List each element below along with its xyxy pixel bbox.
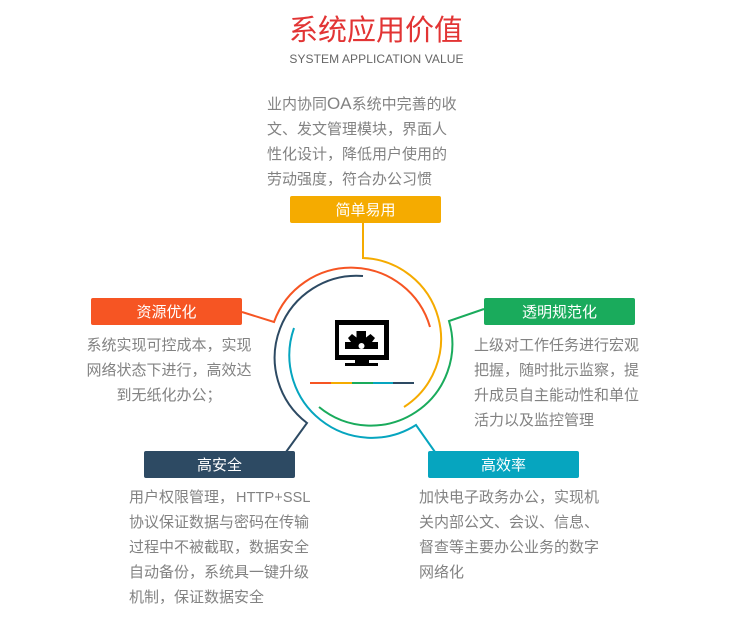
badge: security: 高安全 bbox=[197, 457, 242, 474]
text block: security: 用户权限管理，HTTP+SSL bbox=[129, 489, 311, 506]
text block: security: 自动备份，系统具一键升级 bbox=[129, 564, 309, 581]
arc: standardisation bbox=[319, 309, 484, 426]
text block: resource optimisation: 到无纸化办公； bbox=[116, 387, 222, 404]
text block: ease of use: 性化设计，降低用户使用的 bbox=[267, 146, 447, 163]
text block: standardisation: 上级对工作任务进行宏观 bbox=[474, 337, 639, 354]
arc: security bbox=[275, 276, 363, 452]
text block: efficiency: 网络化 bbox=[419, 564, 464, 581]
badge: efficiency bbox=[428, 451, 579, 478]
badge: ease of use: 简单易用 bbox=[335, 202, 396, 219]
colour bar bbox=[310, 382, 414, 384]
subtitle: SYSTEM APPLICATION VALUE bbox=[289, 52, 464, 66]
text block: resource optimisation bbox=[86, 337, 252, 404]
text block: efficiency: 督查等主要办公业务的数字 bbox=[419, 539, 599, 556]
badge: resource optimisation bbox=[91, 298, 242, 325]
text block: security: 机制，保证数据安全 bbox=[129, 589, 264, 606]
text block: efficiency bbox=[419, 489, 599, 581]
badge: resource optimisation: 资源优化 bbox=[136, 304, 196, 321]
text block: ease of use: 劳动强度，符合办公习惯 bbox=[267, 171, 432, 188]
title: 系统应用价值 bbox=[289, 15, 463, 47]
arc: efficiency bbox=[289, 328, 435, 452]
icon: monitor with gear bbox=[335, 320, 389, 366]
text block: efficiency: 关内部公文、会议、信息、 bbox=[419, 514, 599, 531]
text block: standardisation bbox=[474, 337, 639, 429]
text block: ease of use: 文、发文管理模块，界面人 bbox=[267, 121, 447, 138]
text block: standardisation: 活力以及监控管理 bbox=[474, 412, 594, 429]
text block: ease of use: 业内协同OA系统中完善的收 bbox=[267, 94, 457, 113]
text block: security bbox=[129, 489, 311, 606]
text block: ease of use bbox=[267, 94, 457, 188]
arc: ease of use bbox=[363, 223, 441, 407]
text block: security: 协议保证数据与密码在传输 bbox=[129, 514, 309, 531]
text block: resource optimisation: 系统实现可控成本，实现 bbox=[86, 337, 252, 354]
badge: standardisation: 透明规范化 bbox=[522, 304, 597, 321]
text block: resource optimisation: 网络状态下进行，高效达 bbox=[86, 362, 252, 379]
text block: standardisation: 把握，随时批示监察，提 bbox=[474, 362, 639, 379]
text block: efficiency: 加快电子政务办公，实现机 bbox=[419, 489, 599, 506]
badge: security bbox=[144, 451, 295, 478]
badge: standardisation bbox=[484, 298, 635, 325]
text block: standardisation: 升成员自主能动性和单位 bbox=[474, 387, 639, 404]
text block: security: 过程中不被截取，数据安全 bbox=[129, 539, 309, 556]
arc: resource optimisation bbox=[242, 268, 430, 327]
badge: efficiency: 高效率 bbox=[481, 457, 526, 474]
badge: ease of use bbox=[290, 196, 441, 223]
